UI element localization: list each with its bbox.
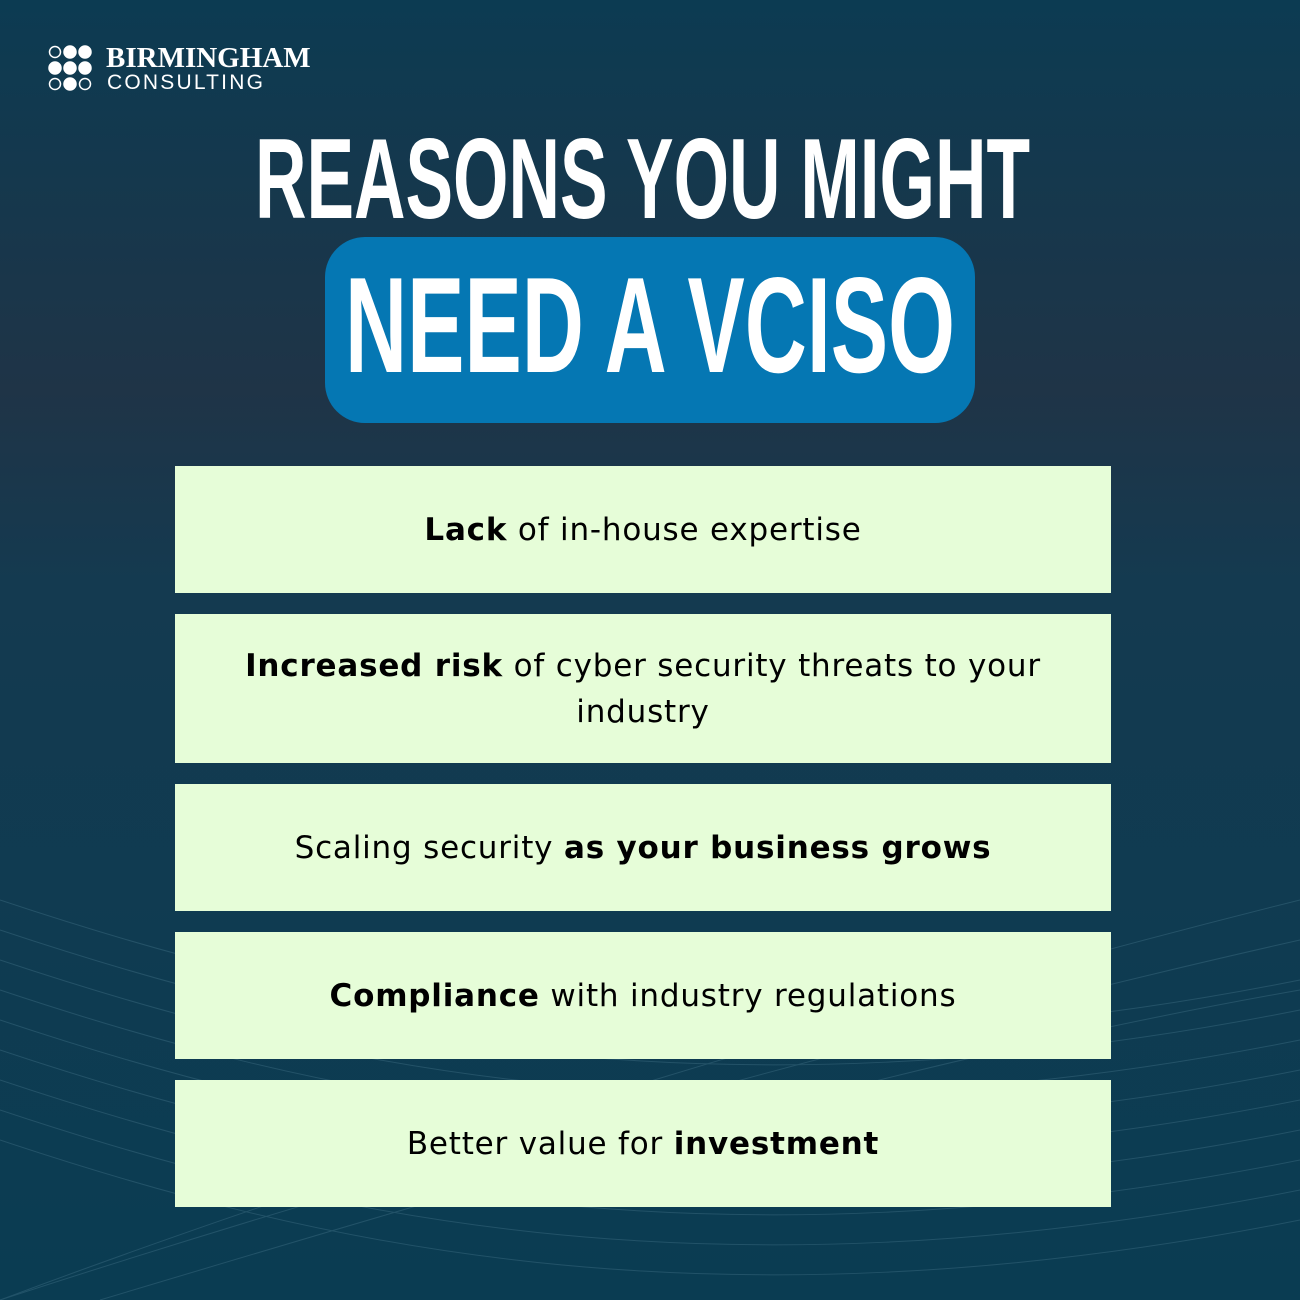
reason 1: Lack of in-house expertise [424,512,862,548]
reason 3 [175,784,1111,911]
reason 2: Increased risk of cyber security threats to your industry [245,648,1041,730]
reason 1 [175,466,1111,593]
reason 3: Scaling security as your business grows [295,830,991,866]
logo: BIRMINGHAM [106,42,311,74]
reason 5: Better value for investment [407,1126,879,1162]
logo [48,42,311,94]
reason 5 [175,1080,1111,1207]
reason 4: Compliance with industry regulations [330,978,956,1014]
reason 4 [175,932,1111,1059]
reason 2 [175,614,1111,763]
logo: CONSULTING [107,71,265,94]
icon: dots [48,45,92,91]
